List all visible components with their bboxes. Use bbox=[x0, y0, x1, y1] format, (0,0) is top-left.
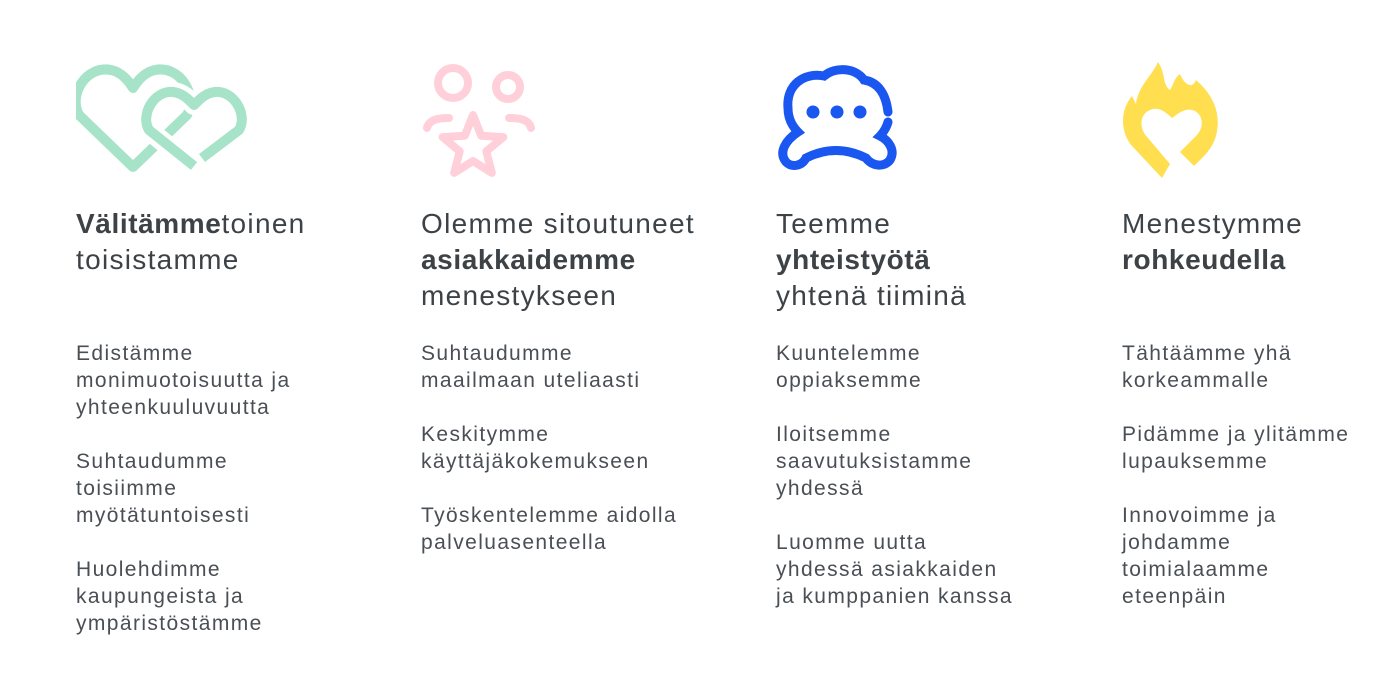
heading: Menestymme bbox=[1122, 208, 1303, 239]
list: Työskentelemme aidolla bbox=[421, 504, 677, 527]
list: Luomme uutta bbox=[776, 531, 927, 554]
list: Edistämme bbox=[76, 342, 194, 365]
list: Tähtäämme yhä bbox=[1122, 342, 1292, 365]
list: palveluasenteella bbox=[421, 531, 607, 554]
list: eteenpäin bbox=[1122, 585, 1227, 608]
list: Huolehdimme bbox=[76, 558, 221, 581]
list: yhdessä asiakkaiden bbox=[776, 558, 998, 581]
list: Keskitymme bbox=[421, 423, 549, 446]
list: toimialaamme bbox=[1122, 558, 1270, 581]
column: teamwork bbox=[776, 65, 1013, 608]
list: Pidämme ja ylitämme bbox=[1122, 423, 1349, 446]
heading bbox=[421, 208, 695, 311]
list: Innovoimme ja bbox=[1122, 504, 1277, 527]
heading: Teemme bbox=[776, 208, 891, 239]
icon: hearts bbox=[76, 64, 247, 172]
list bbox=[421, 342, 677, 554]
list: kaupungeista ja bbox=[76, 585, 244, 608]
list: johdamme bbox=[1122, 531, 1231, 554]
list: Suhtaudumme bbox=[421, 342, 573, 365]
list bbox=[776, 342, 1013, 608]
list: saavutuksistamme bbox=[776, 450, 972, 473]
column: care bbox=[76, 64, 306, 635]
list: yhdessä bbox=[776, 477, 864, 500]
heading: toisistamme bbox=[76, 244, 240, 275]
heading bbox=[76, 208, 306, 275]
list bbox=[1122, 342, 1349, 608]
icon: chat bubble bbox=[778, 65, 897, 170]
list: Kuuntelemme bbox=[776, 342, 921, 365]
list: lupauksemme bbox=[1122, 450, 1268, 473]
list: maailmaan uteliaasti bbox=[421, 369, 640, 392]
heading: rohkeudella bbox=[1122, 244, 1286, 275]
list: Suhtaudumme bbox=[76, 450, 228, 473]
list: oppiaksemme bbox=[776, 369, 922, 392]
heading bbox=[776, 208, 967, 311]
heading: Olemme sitoutuneet bbox=[421, 208, 695, 239]
heading: yhtenä tiiminä bbox=[776, 280, 967, 311]
list: yhteenkuuluvuutta bbox=[76, 396, 270, 419]
icon: flaming heart bbox=[1123, 62, 1218, 178]
list: ja kumppanien kanssa bbox=[776, 585, 1013, 608]
list: Iloitsemme bbox=[776, 423, 892, 446]
heading: menestykseen bbox=[421, 280, 617, 311]
list: myötätuntoisesti bbox=[76, 504, 250, 527]
list bbox=[76, 342, 291, 635]
heading bbox=[1122, 208, 1303, 275]
heading: Välitämmetoinen bbox=[76, 208, 306, 239]
list: monimuotoisuutta ja bbox=[76, 369, 291, 392]
list: ympäristöstämme bbox=[76, 612, 263, 635]
column: courage bbox=[1122, 62, 1349, 608]
column: customers bbox=[421, 64, 695, 554]
heading: asiakkaidemme bbox=[421, 244, 636, 275]
list: toisiimme bbox=[76, 477, 177, 500]
list: korkeammalle bbox=[1122, 369, 1270, 392]
heading: yhteistyötä bbox=[776, 244, 930, 275]
icon: people with star bbox=[423, 64, 535, 177]
list: käyttäjäkokemukseen bbox=[421, 450, 650, 473]
